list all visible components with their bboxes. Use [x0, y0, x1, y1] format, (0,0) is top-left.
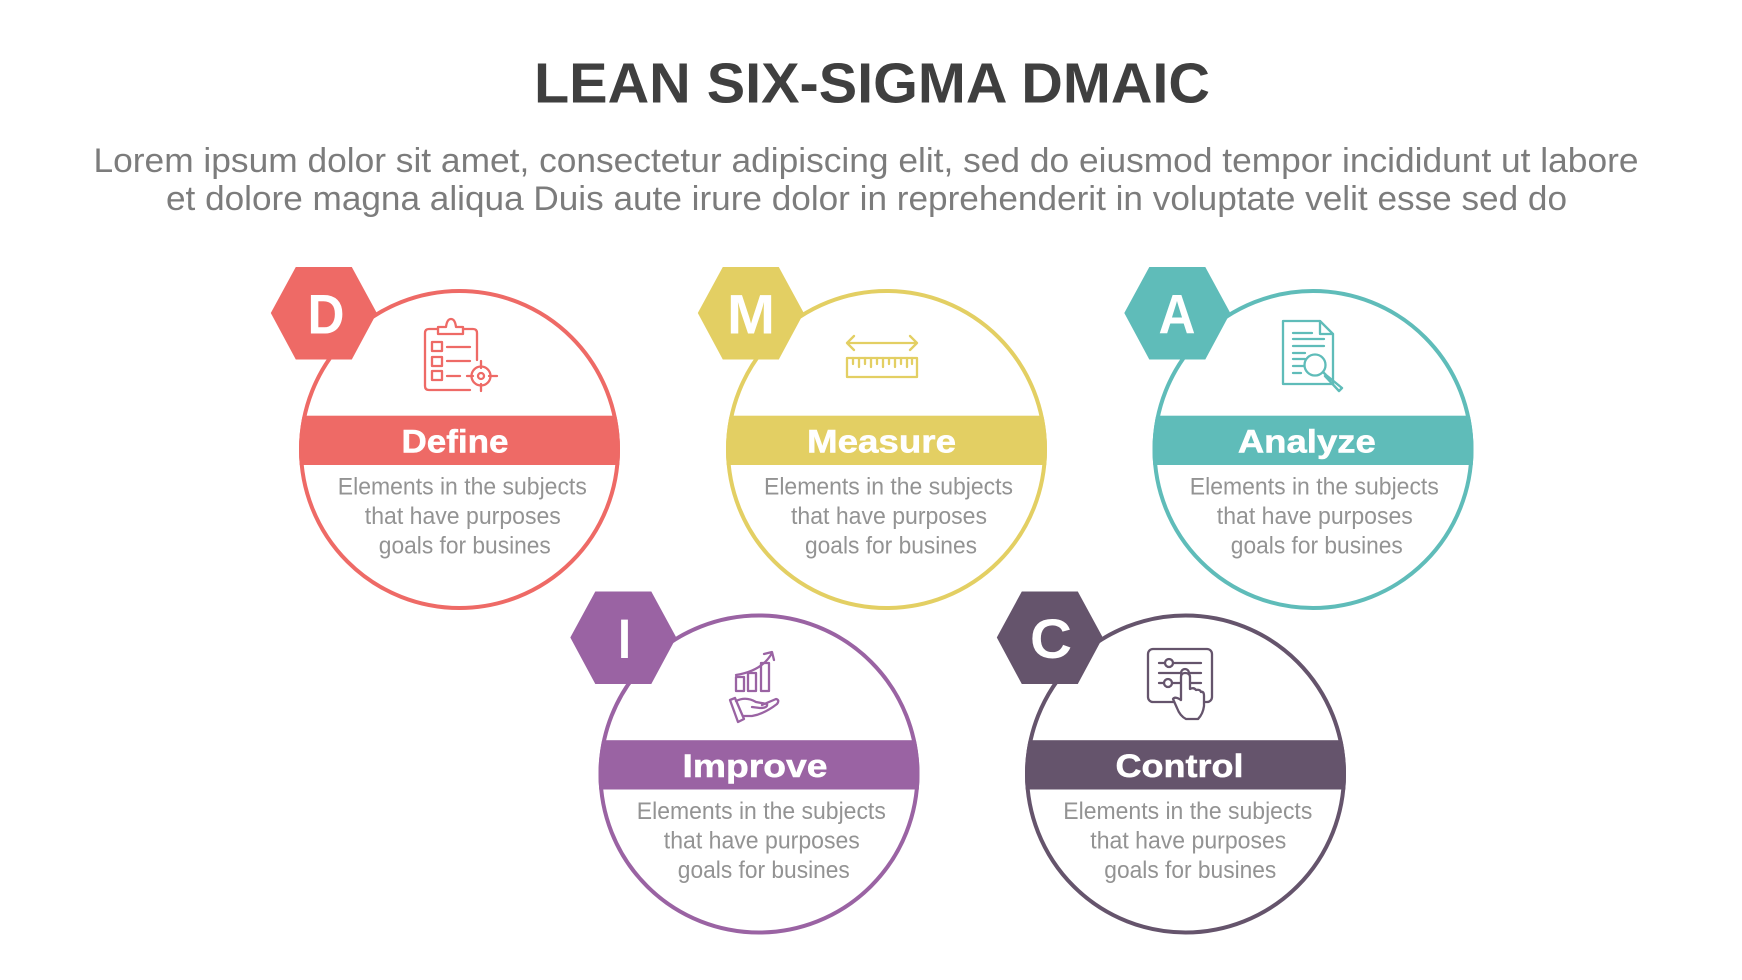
subtitle text	[94, 142, 1638, 218]
hexagon badge	[271, 267, 377, 360]
title: LEAN SIX-SIGMA DMAIC	[534, 52, 1210, 116]
badge letter: C	[1030, 607, 1072, 670]
body text: goals for busines	[1104, 857, 1276, 884]
band	[598, 740, 920, 790]
body text: Elements in the subjects	[338, 474, 587, 500]
body text	[1063, 798, 1312, 884]
band	[1024, 740, 1346, 790]
circle outline	[1027, 616, 1344, 932]
body text	[637, 798, 886, 884]
body text: Elements in the subjects	[1190, 474, 1439, 500]
heading: Improve	[682, 748, 828, 784]
body text: Elements in the subjects	[1063, 798, 1312, 825]
panel: analyze	[1124, 267, 1474, 608]
circle outline	[728, 291, 1045, 608]
panel: measure	[698, 267, 1048, 608]
body text	[764, 474, 1013, 560]
hexagon badge	[1124, 267, 1230, 360]
hexagon badge	[698, 267, 804, 360]
subtitle text: Lorem ipsum dolor sit amet, consectetur adipiscing elit, sed do eiusmod tempor incididunt ut labore	[94, 142, 1638, 180]
icon: sliders panel with hand	[1148, 649, 1212, 719]
badge letter: D	[308, 282, 344, 346]
body text: that have purposes	[791, 503, 987, 530]
heading: Analyze	[1238, 424, 1376, 460]
badge letter: I	[618, 607, 631, 670]
circle outline	[301, 291, 618, 608]
heading: Control	[1116, 748, 1244, 784]
subtitle text: et dolore magna aliqua Duis aute irure dolor in reprehenderit in voluptate velit esse sed do	[166, 180, 1567, 218]
circle outline	[1154, 291, 1472, 608]
badge letter: A	[1158, 282, 1196, 346]
icon: ruler with arrow	[847, 336, 917, 377]
band	[726, 416, 1048, 465]
heading: Define	[402, 424, 508, 460]
body text: goals for busines	[1231, 532, 1403, 560]
icon: growth chart over hand	[730, 652, 778, 722]
body text: Elements in the subjects	[637, 798, 886, 825]
band	[1152, 416, 1474, 465]
body text: that have purposes	[1217, 503, 1413, 530]
band	[298, 416, 620, 465]
heading: Measure	[807, 424, 956, 460]
body text: that have purposes	[1090, 828, 1286, 854]
badge letter: M	[727, 282, 775, 346]
panel: improve	[570, 592, 920, 932]
body text: goals for busines	[805, 532, 977, 560]
body text: that have purposes	[365, 503, 561, 530]
hexagon badge	[997, 592, 1103, 684]
body text: goals for busines	[379, 532, 551, 560]
panel: define	[271, 267, 620, 608]
body text: goals for busines	[678, 857, 850, 884]
body text	[1190, 474, 1439, 560]
panel: control	[997, 592, 1346, 932]
body text	[338, 474, 587, 560]
body text: Elements in the subjects	[764, 474, 1013, 500]
icon: clipboard with target	[425, 319, 497, 391]
icon: document with magnifier	[1283, 321, 1342, 391]
hexagon badge	[570, 592, 676, 684]
circle outline	[600, 616, 918, 932]
body text: that have purposes	[664, 828, 860, 854]
